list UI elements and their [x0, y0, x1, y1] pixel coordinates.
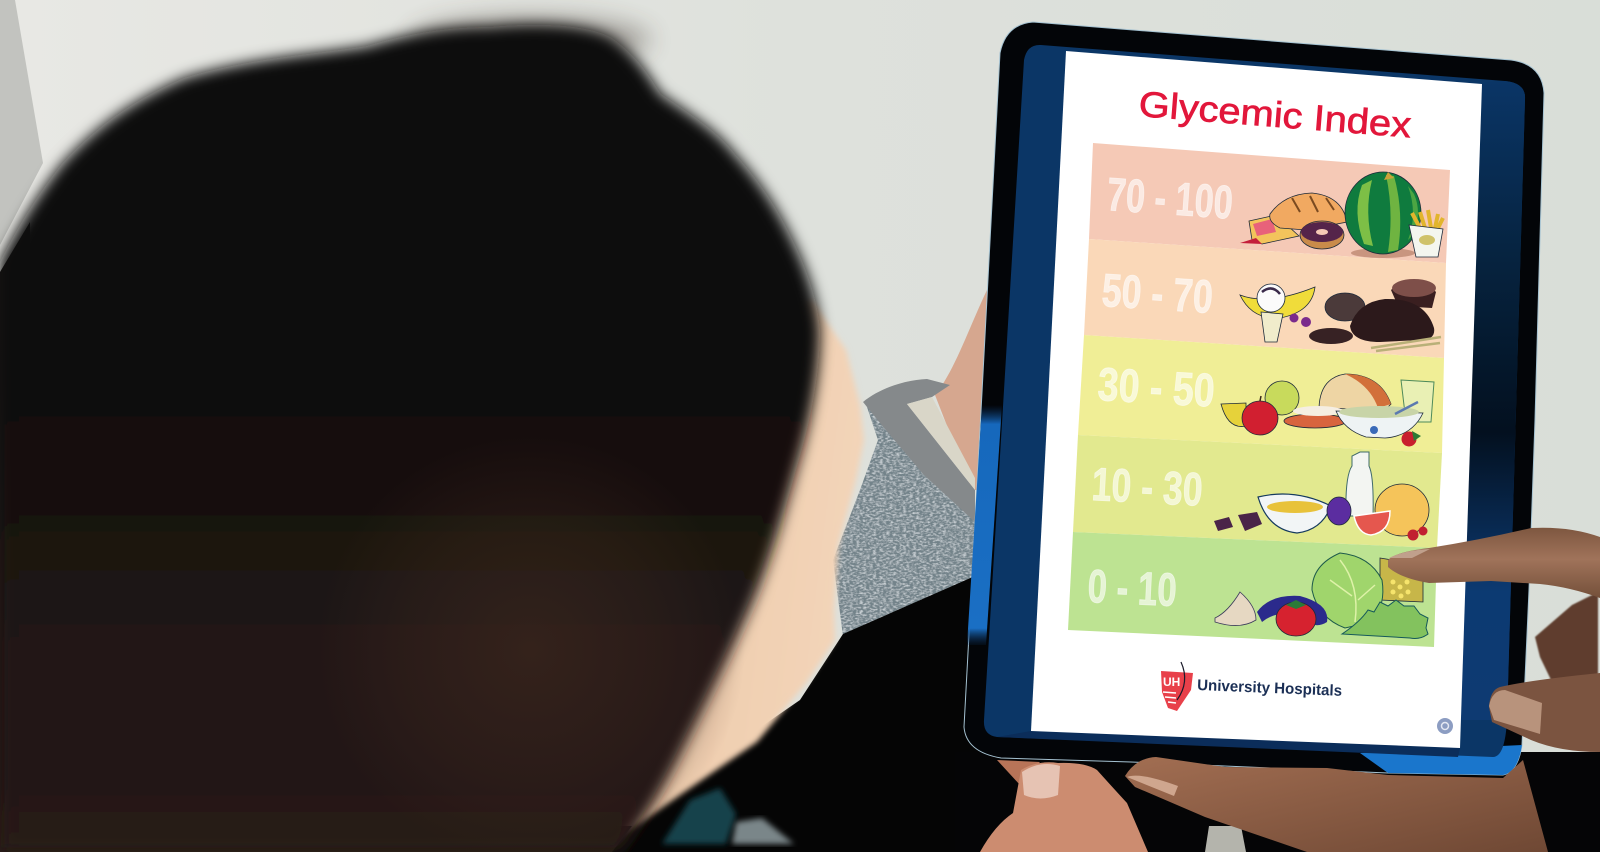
food: cabbage: [1312, 553, 1383, 628]
pointing index finger: [1388, 528, 1600, 598]
woman's sleeve and hand behind the tablet: [833, 290, 987, 636]
food: strawberry: [1402, 431, 1421, 446]
food: green apple: [1265, 381, 1299, 415]
food: bread loaf: [1270, 193, 1347, 230]
band: 50 - 70: [1084, 239, 1446, 358]
logo wordmark: University Hospitals: [1197, 677, 1342, 700]
tablet screen surround: [967, 45, 1525, 757]
food: french fries: [1409, 210, 1443, 257]
white tablet page: [1031, 51, 1482, 748]
food: corn: [1380, 558, 1423, 602]
food: lettuce: [1342, 600, 1428, 638]
left thumb holding tablet: [980, 760, 1148, 852]
food: watermelon: [1345, 172, 1421, 258]
band: 0 - 10: [1068, 532, 1437, 647]
right hand palm and thumb below tablet: [1125, 757, 1548, 852]
food: grapefruit slice: [1354, 511, 1390, 535]
food: dark cookie: [1309, 328, 1353, 344]
label 30 - 50: 30 - 50: [1096, 357, 1216, 417]
food: wheat stalks: [1371, 337, 1441, 351]
food: soup bowl: [1258, 494, 1331, 533]
logo shield: [1161, 662, 1193, 711]
band: 30 - 50: [1078, 335, 1444, 453]
food: milk bottle: [1346, 452, 1373, 516]
food: glass of juice: [1401, 380, 1434, 422]
food: ice cream cone: [1257, 284, 1285, 342]
food: bowl of porridge: [1336, 402, 1423, 438]
title: Glycemic Index: [1137, 83, 1413, 145]
tablet body: [964, 22, 1544, 775]
food: lemon half: [1221, 403, 1246, 427]
woman's blurred dark hair: [0, 16, 820, 852]
food: eggplant: [1257, 596, 1327, 625]
food: whole grain bread: [1319, 374, 1391, 410]
food: donut: [1300, 221, 1344, 249]
food: dark muffin: [1325, 293, 1365, 321]
food: red apple: [1242, 396, 1278, 435]
woman's cheek and neck: [520, 300, 864, 846]
dark clothing: [590, 576, 1600, 852]
food: dark rye loaf: [1350, 299, 1434, 342]
logo shield: UH: [1163, 675, 1180, 689]
label 50 - 70: 50 - 70: [1100, 263, 1215, 323]
food: red cherries: [1408, 526, 1428, 540]
label 70 - 100: 70 - 100: [1105, 167, 1235, 229]
food: tomato: [1276, 600, 1316, 636]
label 10 - 30: 10 - 30: [1090, 457, 1204, 516]
right hand behind pointing finger: [1535, 592, 1598, 698]
food: plum: [1327, 497, 1351, 525]
food: orange: [1375, 484, 1429, 536]
University Hospitals logo: [1161, 662, 1342, 711]
food: cherries: [1290, 314, 1311, 327]
food: garlic: [1215, 592, 1256, 626]
food: chocolate pieces: [1214, 512, 1262, 531]
food: toaster pastry: [1240, 215, 1299, 244]
small settings icon: [1437, 718, 1453, 734]
food: grain bowl: [1391, 279, 1436, 308]
label 0 - 10: 0 - 10: [1087, 559, 1178, 616]
right thumb: [1489, 673, 1600, 752]
band: 10 - 30: [1073, 435, 1442, 548]
food: sliced sandwich: [1284, 406, 1346, 428]
band: 70 - 100: [1089, 143, 1450, 263]
food: bananas: [1240, 287, 1315, 318]
